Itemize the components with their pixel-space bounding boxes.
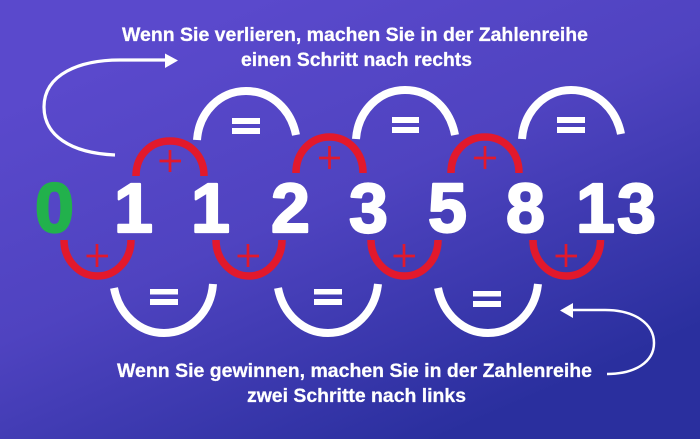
number row: 1 [576, 169, 615, 247]
arrow: win, two steps left [560, 303, 654, 374]
bottom caption [117, 360, 592, 407]
top caption: einen Schritt nach rechts [241, 49, 472, 71]
top caption [122, 24, 588, 71]
bottom white arcs with equals signs [114, 284, 538, 333]
top red arcs with plus signs [136, 137, 519, 176]
top caption: Wenn Sie verlieren, machen Sie in der Zahlenreihe [122, 24, 588, 46]
number row [35, 169, 656, 247]
top white arcs with equals signs [197, 90, 621, 140]
bottom caption: zwei Schritte nach links [247, 385, 466, 407]
number row: 0 [35, 169, 74, 247]
number row: 1 [191, 169, 230, 247]
number row: 8 [506, 169, 545, 247]
arrow: lose, step right [44, 54, 178, 155]
number row: 1 [114, 169, 153, 247]
number row: 3 [349, 169, 388, 247]
number row: 2 [271, 169, 310, 247]
number row: 5 [428, 169, 467, 247]
bottom caption: Wenn Sie gewinnen, machen Sie in der Zahlenreihe [117, 360, 592, 382]
number row: 3 [617, 169, 656, 247]
bottom red arcs with plus signs [64, 240, 600, 276]
